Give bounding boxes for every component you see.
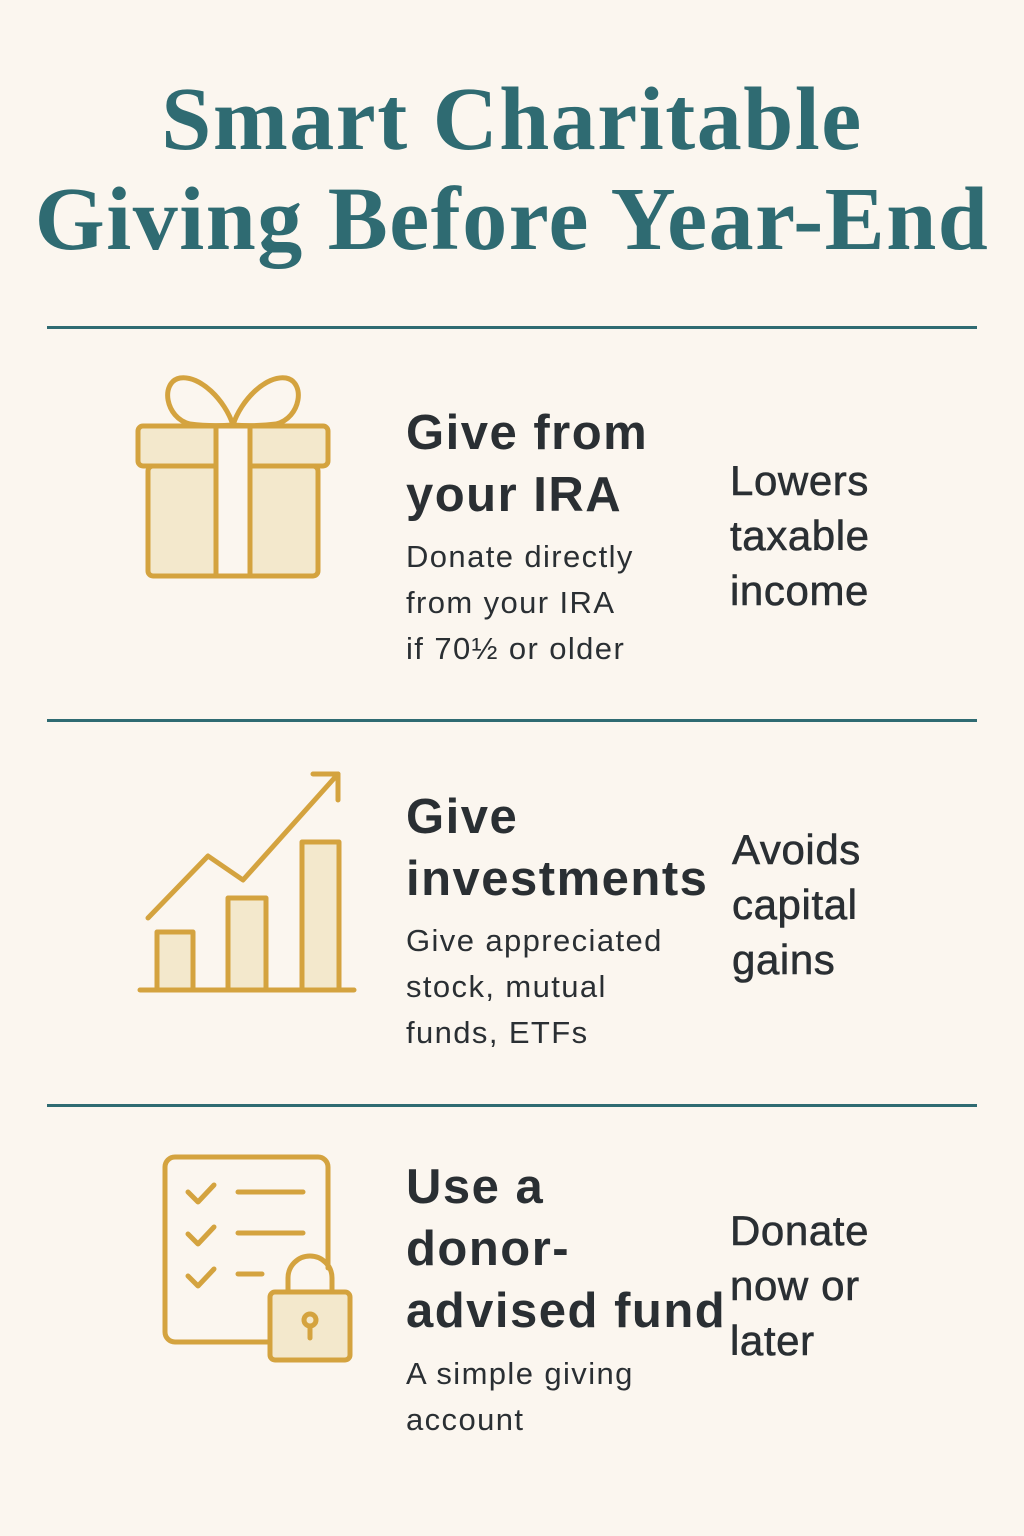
- heading: DAF: advised fund: [406, 1284, 726, 1338]
- body: IRA: Donate directly: [406, 539, 634, 574]
- benefit: IRA: taxable: [730, 512, 870, 559]
- body: IRA: from your IRA: [406, 585, 615, 620]
- body: DAF: account: [406, 1402, 524, 1437]
- benefit: investments: gains: [732, 936, 835, 983]
- title: Giving Before Year-End: [35, 170, 989, 269]
- heading: investments: [406, 790, 708, 906]
- title: Smart Charitable: [161, 70, 863, 169]
- heading: DAF: Use a: [406, 1160, 544, 1214]
- benefit: DAF: now or: [730, 1262, 860, 1309]
- heading: IRA: Give from: [406, 406, 648, 460]
- body: investments: [406, 923, 663, 1050]
- benefit: investments: Avoids: [732, 826, 861, 873]
- heading: investments: investments: [406, 852, 708, 906]
- body: IRA: [406, 539, 634, 666]
- heading: IRA: your IRA: [406, 468, 622, 522]
- title: [35, 70, 989, 269]
- icon: gift: [136, 375, 330, 578]
- icon: chart: [138, 772, 356, 992]
- benefit: IRA: [730, 457, 870, 614]
- body: investments: funds, ETFs: [406, 1015, 589, 1050]
- heading: DAF: donor-: [406, 1222, 570, 1276]
- heading: IRA: [406, 406, 648, 522]
- icon: checklist lock: [162, 1154, 352, 1362]
- heading: DAF: [406, 1160, 726, 1338]
- benefit: investments: [732, 826, 861, 983]
- body: investments: stock, mutual: [406, 969, 607, 1004]
- benefit: DAF: [730, 1207, 869, 1364]
- body: IRA: if 70½ or older: [406, 631, 625, 666]
- body: DAF: A simple giving: [406, 1356, 634, 1391]
- benefit: IRA: Lowers: [730, 457, 869, 504]
- benefit: DAF: later: [730, 1317, 815, 1364]
- body: investments: Give appreciated: [406, 923, 663, 958]
- benefit: investments: capital: [732, 881, 858, 928]
- body: DAF: [406, 1356, 634, 1437]
- benefit: IRA: income: [730, 567, 869, 614]
- benefit: DAF: Donate: [730, 1207, 869, 1254]
- heading: investments: Give: [406, 790, 518, 844]
